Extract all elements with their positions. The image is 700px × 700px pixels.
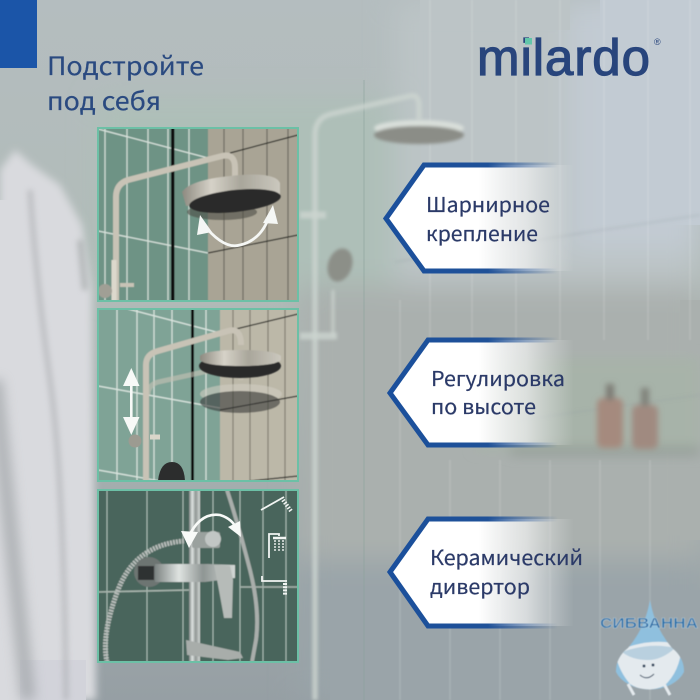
logo: milardo: ®	[654, 37, 661, 47]
callout: swivel mount: Шарнирное	[426, 188, 550, 218]
watermark: Sibvanna logo: СИБВАННА	[600, 615, 698, 632]
callout: height adjustment: по высоте	[431, 390, 536, 420]
arrow: curved diverter arrow	[181, 515, 241, 548]
callout: height adjustment	[389, 340, 574, 445]
watermark: Sibvanna logo	[600, 600, 698, 695]
panel: swivel mount photo	[97, 127, 299, 302]
blurred shower head	[374, 120, 464, 144]
callout: ceramic diverter: дивертор	[430, 570, 530, 600]
title	[47, 47, 204, 118]
title: Подстройте	[47, 47, 204, 83]
icon: tilted rain shower head	[182, 175, 282, 220]
title: под себя	[47, 82, 161, 118]
blurred shower rail and arm	[300, 96, 419, 700]
callout: swivel mount: крепление	[426, 217, 538, 247]
logo: milardo: milardo	[477, 29, 650, 86]
icon: rain shower head	[199, 350, 281, 378]
callout: swivel mount	[385, 165, 574, 271]
blurred bottles on shelf	[597, 384, 658, 449]
callout: height adjustment: Регулировка	[431, 362, 565, 392]
icon: hand shower	[158, 462, 185, 481]
callout: ceramic diverter: Керамический	[430, 541, 583, 571]
arrow: vertical double arrow	[123, 368, 140, 435]
blurred bath robe	[0, 150, 96, 700]
callout: ceramic diverter	[389, 519, 583, 626]
arrow: curved swivel arrow	[197, 205, 278, 246]
panel: height adjustment photo	[97, 308, 299, 482]
icons: water modes	[261, 497, 291, 595]
panel: ceramic diverter photo	[97, 489, 299, 663]
blue corner block	[0, 0, 37, 68]
blurred glass edge	[363, 80, 365, 700]
blurred hand shower	[323, 245, 357, 285]
unblurred edge fills	[330, 0, 700, 700]
